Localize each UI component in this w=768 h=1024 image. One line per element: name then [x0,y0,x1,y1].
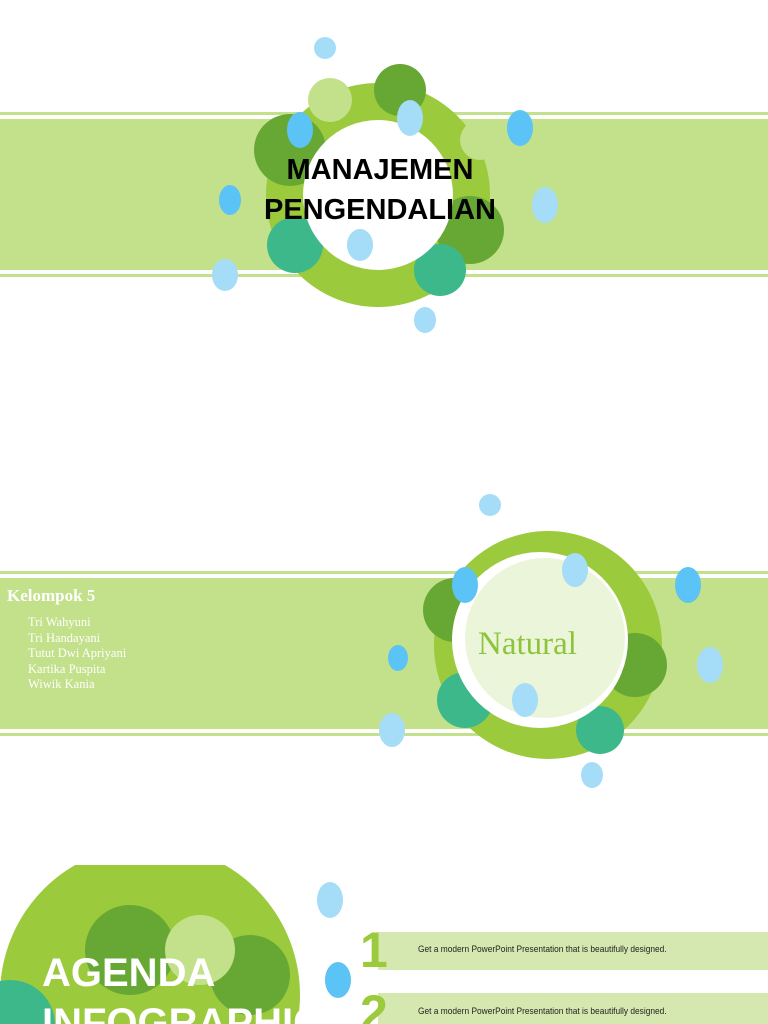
title: MANAJEMEN [287,154,473,186]
agenda item 1 [360,922,768,978]
list: members: Tri Wahyuni [28,615,91,629]
heading: AGENDA INFOGRAPHIC: AGENDA [42,951,215,995]
band: group band [0,571,768,736]
text: Natural: Natural [478,626,577,662]
title: PENGENDALIAN [264,194,496,226]
list: members: Kartika Puspita [28,662,105,676]
list: members: Tri Handayani [28,630,100,644]
wreath: title wreath [212,37,558,333]
agenda blob [0,865,351,1024]
heading: Kelompok 5: Kelompok 5 [7,586,95,605]
list: members [28,615,126,691]
agenda item 2 [360,993,768,1024]
title [264,154,496,226]
agenda item 1: Get a modern PowerPoint Presentation that is beautifully designed. [418,944,667,955]
agenda item 1: 1 [360,922,388,978]
list: members: Tutut Dwi Apriyani [28,646,126,660]
wreath: natural wreath [379,494,723,788]
heading: AGENDA INFOGRAPHIC [42,951,322,1024]
agenda item 2: Get a modern PowerPoint Presentation that is beautifully designed. [418,1006,667,1017]
list: members: Wiwik Kania [28,677,94,691]
band: top title band [0,112,768,277]
